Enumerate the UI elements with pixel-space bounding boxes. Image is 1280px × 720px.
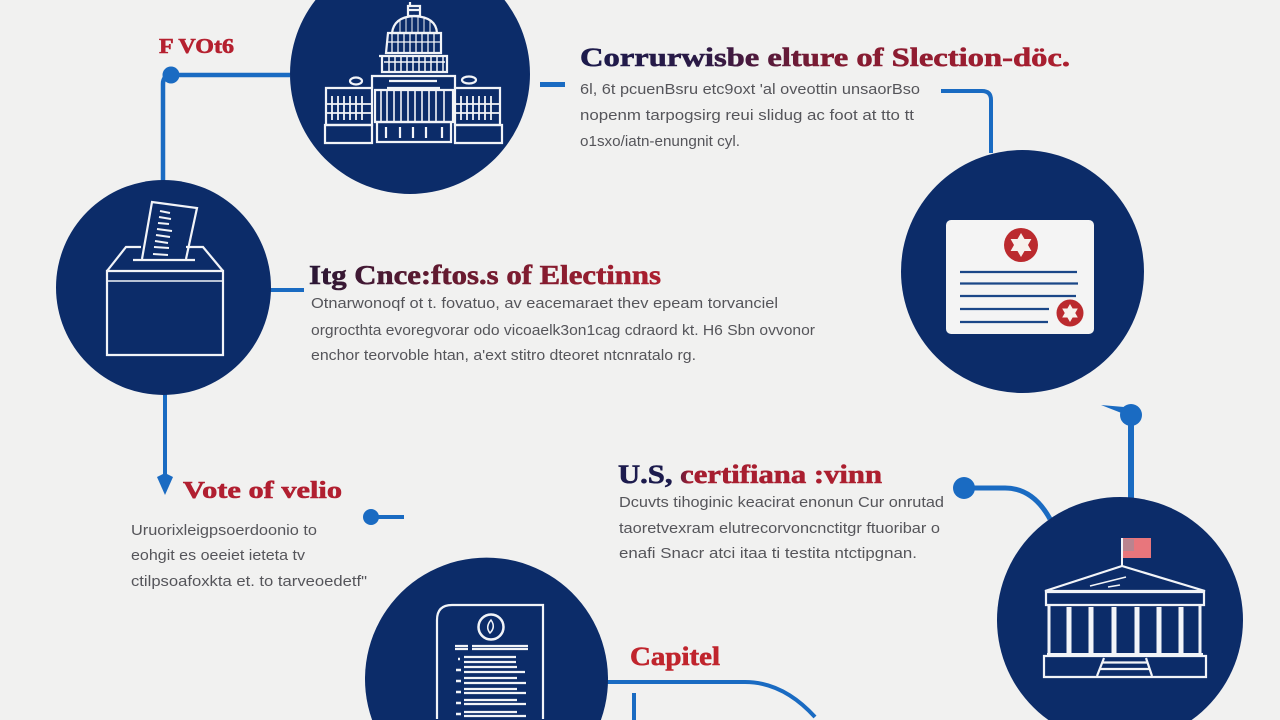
document circle: [365, 558, 608, 720]
body: vote: eohgit es oeeiet ieteta tv: [131, 547, 306, 564]
body: top right: o1sxo/iatn-enungnit cyl.: [580, 133, 740, 150]
connector: small dot and dash: [363, 509, 404, 525]
text block: elections: [309, 260, 815, 364]
connector: document to lower right: [607, 682, 815, 720]
connector: top-left line with dot: [162, 66, 290, 181]
building circle: [997, 497, 1243, 720]
connector: arrow down from ballot: [157, 394, 173, 495]
body: top right: 6l, 6t pcuenBsru etc9oxt 'al oveottin unsaorBso: [580, 81, 920, 98]
heading: certification: U.S, certifiana :vinn: [618, 460, 883, 489]
panel: document: [365, 558, 608, 720]
body: vote: [131, 522, 367, 590]
body: elections: enchor teorvoble htan, a'ext stitro dteoret ntcnratalo rg.: [311, 347, 696, 364]
connector: capitol dash: [540, 82, 565, 87]
icon: flag: [1121, 538, 1151, 566]
body: top right: [580, 81, 920, 150]
body: certification: Dcuvts tihoginic keacirat enonun Cur onrutad: [619, 494, 944, 511]
connector: dot curve to building: [953, 477, 1050, 519]
body: elections: orgrocthta evoregvorar odo vicoaelk3on1cag cdraord kt. H6 Sbn ovvonor: [311, 322, 815, 339]
body: certification: enafi Snacr atci itaa ti testita ntctipgnan.: [619, 545, 917, 562]
text block: top right: [580, 43, 1070, 150]
icon: document with seal: [437, 605, 543, 719]
ballot circle: [56, 180, 271, 395]
heading: vote: Vote of velio: [183, 478, 342, 504]
text block: vote: [131, 478, 367, 590]
label: I Vote: F VOt6: [159, 34, 234, 58]
connector: to certificate circle: [941, 91, 991, 153]
label: Capitol: Capitel: [630, 642, 720, 671]
heading: top right: Corrurwisbe elture of Slection-döc.: [580, 43, 1070, 72]
connector: certificate to building: [1101, 404, 1142, 498]
panel: certificate: [901, 150, 1144, 393]
body: certification: taoretvexram elutrecorvoncnctitgr ftuoribar o: [619, 520, 940, 537]
capitol circle: [290, 0, 530, 194]
heading: elections: Itg Cnce:ftos.s of Electinns: [309, 260, 661, 290]
body: vote: Uruorixleigpsoerdoonio to: [131, 522, 317, 539]
body: vote: ctilpsoafoxkta et. to tarveoedetf": [131, 573, 367, 590]
body: top right: nopenm tarpogsirg reui slidug ac foot at tto tt: [580, 107, 915, 124]
certificate circle: [901, 150, 1144, 393]
icon: ballot box with paper: [107, 202, 223, 355]
panel: government building: [997, 497, 1243, 720]
panel: ballot box: [56, 180, 271, 395]
connector: ballot to text: [270, 288, 304, 292]
text block: certification: [618, 460, 944, 562]
body: certification: [619, 494, 944, 562]
icon: capitol building: [325, 2, 502, 143]
panel: capitol: [290, 0, 530, 194]
icon: columned building: [1044, 566, 1206, 677]
icon: certificate card: [946, 220, 1094, 334]
body: elections: [311, 295, 815, 364]
body: elections: Otnarwonoqf ot t. fovatuo, av eacemaraet thev epeam torvanciel: [311, 295, 778, 312]
